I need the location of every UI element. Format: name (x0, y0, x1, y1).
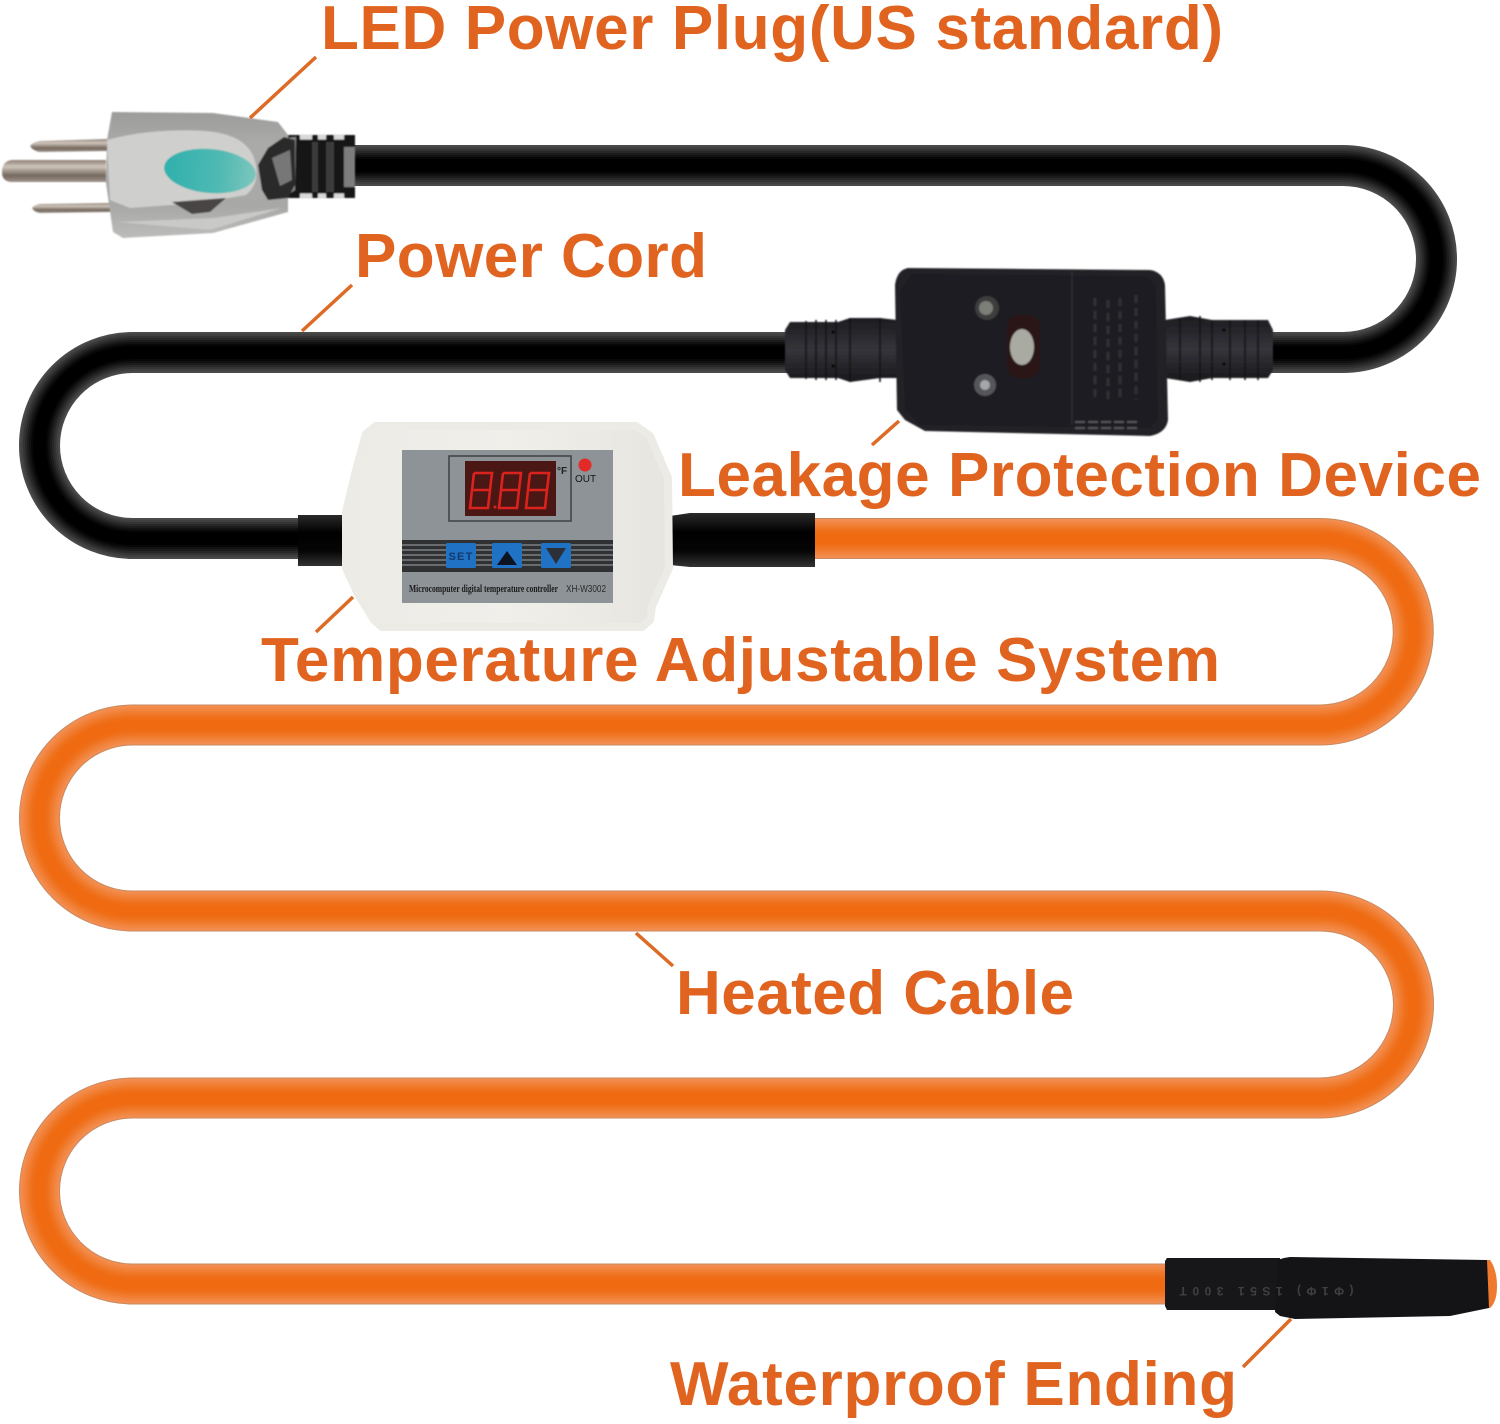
indicator LED (975, 296, 999, 320)
leader: power cord (302, 285, 352, 331)
output lamp (578, 458, 592, 472)
label: waterproof ending: Waterproof Ending (670, 1350, 1237, 1419)
leader: plug (250, 57, 316, 118)
leader: temperature system (316, 597, 353, 632)
leader: waterproof ending (1243, 1319, 1291, 1367)
orange tip (1484, 1260, 1497, 1308)
model text: Microcomputer digital temperature controller (409, 584, 558, 595)
up button (492, 543, 522, 568)
left cable sleeve (298, 515, 344, 566)
black power cord (39, 166, 1436, 538)
printed marking: (Φ1Φ) 1S51 300T (1178, 1284, 1354, 1298)
label: temperature adjustable system: Temperature Adjustable System (261, 626, 1220, 695)
LED teal glow (162, 145, 258, 197)
SET button: SET (448, 551, 474, 563)
controller housing (346, 426, 669, 627)
grey control panel (402, 450, 613, 603)
right cable sleeve (670, 513, 815, 567)
unit label: °F (557, 466, 567, 477)
leader: leakage device (872, 421, 899, 445)
left connector (785, 318, 897, 382)
label: power cord: Power Cord (355, 222, 707, 291)
plug prongs (2, 139, 111, 213)
test button (1007, 315, 1040, 378)
waterproof ending (1165, 1257, 1497, 1319)
icon: LED power plug (2, 112, 355, 238)
narrow heat shrink (1165, 1258, 1280, 1310)
label: heated cable: Heated Cable (676, 959, 1074, 1028)
SET button (446, 543, 476, 568)
reset screw (974, 374, 996, 396)
striped button band (402, 540, 613, 572)
down button (541, 543, 571, 568)
leader: heated cable (636, 933, 673, 966)
output label: OUT (575, 474, 596, 485)
wide heat shrink (1275, 1257, 1489, 1319)
temperature controller (346, 426, 669, 627)
device body (895, 268, 1168, 436)
leakage protection device (785, 268, 1273, 436)
model number: XH-W3002 (566, 584, 606, 595)
red LED display (465, 461, 556, 516)
orange heated cable (39, 538, 1413, 1284)
strain relief (286, 135, 355, 198)
translucent plug body (106, 112, 288, 238)
right connector (1165, 316, 1273, 382)
label: leakage protection device: Leakage Protection Device (678, 441, 1481, 510)
display frame (449, 456, 571, 521)
